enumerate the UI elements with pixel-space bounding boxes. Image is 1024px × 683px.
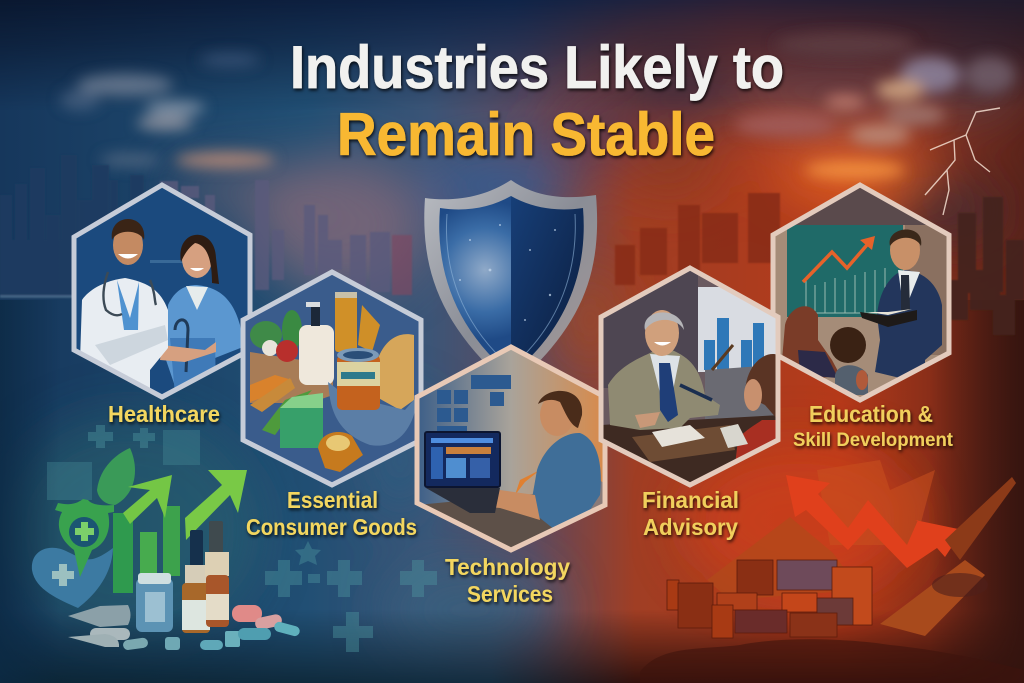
label: education and skill development: Skill Development — [793, 430, 954, 451]
panel: essential consumer goods — [243, 272, 421, 486]
lightning bolt — [925, 108, 1000, 215]
nurse — [160, 235, 243, 395]
advisor — [608, 310, 720, 447]
panel: education and skill development — [773, 185, 949, 400]
label: essential consumer goods — [246, 487, 417, 540]
faint medical plus icons — [47, 425, 437, 652]
label: healthcare: Healthcare — [108, 401, 220, 427]
title — [290, 34, 784, 168]
icon: central shield — [424, 180, 597, 388]
label: education and skill development — [793, 401, 954, 451]
label: technology services: Services — [467, 581, 553, 607]
students — [782, 306, 868, 395]
doctor — [80, 219, 168, 395]
skyline: red city — [615, 193, 1024, 335]
label: financial advisory: Advisory — [643, 514, 738, 540]
skyline: blue city — [0, 155, 412, 298]
label: education and skill development: Education & — [809, 401, 933, 427]
clouds — [60, 33, 1015, 179]
client — [720, 354, 778, 465]
panel: healthcare — [74, 185, 250, 397]
green health and growth illustration — [32, 448, 247, 608]
title: Industries Likely to — [290, 34, 784, 101]
laptop — [425, 432, 500, 513]
medicine bottles and pills — [68, 521, 301, 651]
label: financial advisory — [642, 487, 739, 540]
groceries — [250, 292, 418, 472]
label: financial advisory: Financial — [642, 487, 739, 513]
panel: technology services — [417, 347, 605, 550]
label: technology services — [445, 554, 570, 607]
red falling arrow, documents and crates — [640, 460, 1024, 683]
label: essential consumer goods: Essential — [287, 487, 378, 513]
panel: financial advisory — [601, 268, 780, 485]
title: Remain Stable — [337, 101, 715, 168]
label: technology services: Technology — [445, 554, 570, 580]
label: essential consumer goods: Consumer Goods — [246, 514, 417, 540]
teacher — [860, 229, 942, 378]
programmer — [496, 390, 602, 528]
